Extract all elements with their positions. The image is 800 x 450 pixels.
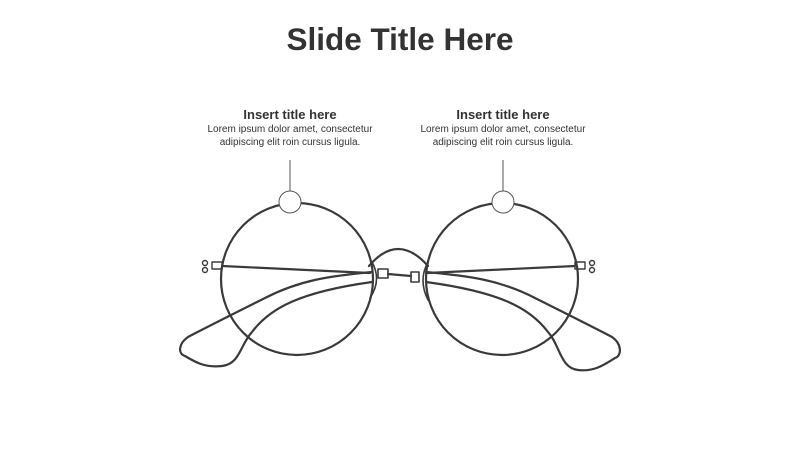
text block: right bbox=[420, 107, 586, 148]
left temple arm bbox=[180, 272, 372, 366]
text block: left bbox=[207, 107, 373, 148]
left temple bar bbox=[222, 266, 411, 276]
text block: left: Insert title here bbox=[243, 107, 337, 122]
right lens bbox=[426, 203, 578, 355]
right temple arm bbox=[426, 272, 620, 370]
text block: right: Lorem ipsum dolor amet, consectetur bbox=[420, 124, 586, 135]
text block: right: Insert title here bbox=[456, 107, 550, 122]
marker: right bbox=[492, 191, 514, 213]
marker: left bbox=[279, 191, 301, 213]
text block: left: Lorem ipsum dolor amet, consectetur bbox=[207, 124, 373, 135]
connector lines bbox=[290, 160, 503, 191]
right temple bar bbox=[427, 266, 575, 273]
nose pads bbox=[370, 262, 428, 300]
text block: right: adipiscing elit roin cursus ligula. bbox=[433, 137, 573, 148]
left lens bbox=[221, 203, 373, 355]
text block: left: adipiscing elit roin cursus ligula. bbox=[220, 137, 360, 148]
bridge bbox=[369, 249, 428, 266]
hinges bbox=[202, 260, 594, 272]
title: Slide Title Here bbox=[286, 21, 514, 57]
